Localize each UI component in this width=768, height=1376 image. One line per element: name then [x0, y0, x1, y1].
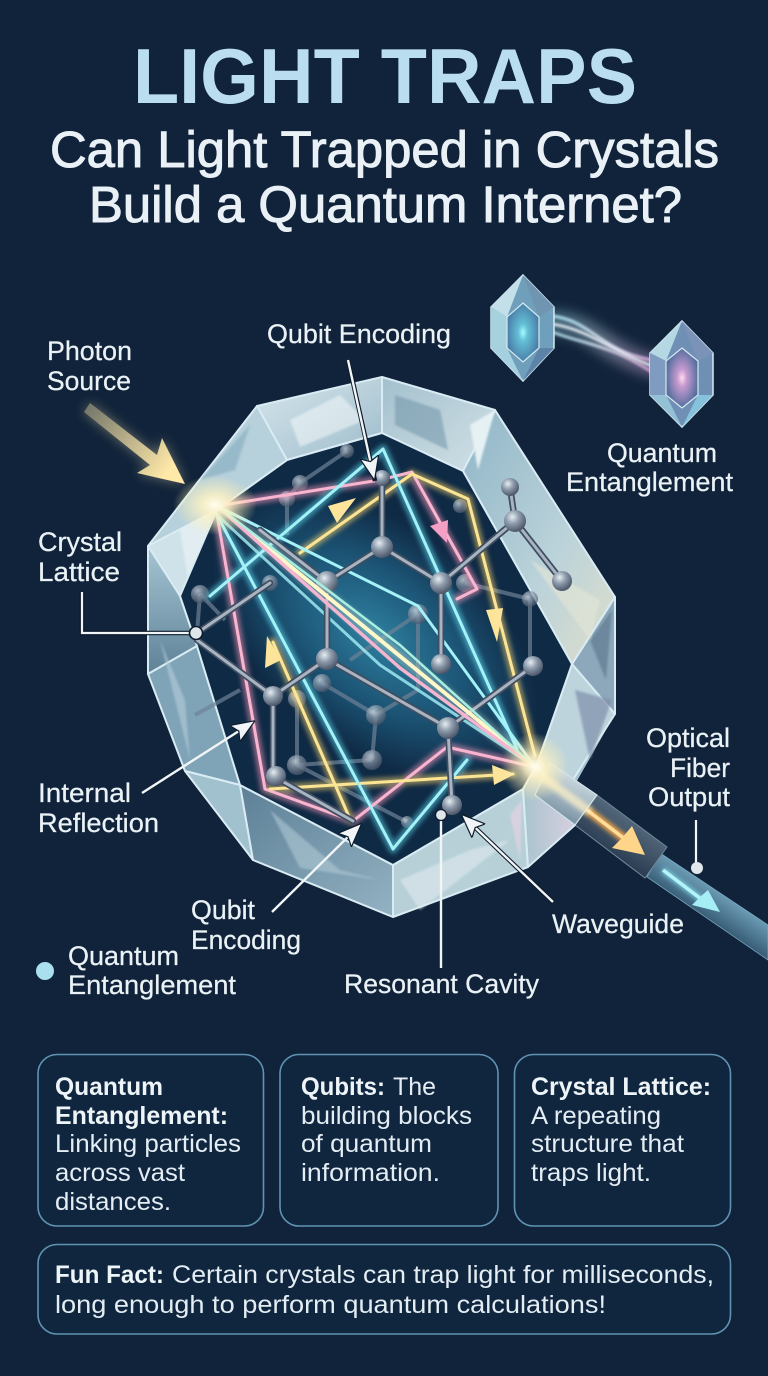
label: crystal lattice: Lattice	[38, 557, 120, 587]
label: photon source: Source	[47, 366, 131, 396]
label: qubit encoding bottom	[191, 895, 301, 955]
arrow: photon source	[84, 403, 185, 484]
subtitle: Build a Quantum Internet?	[89, 176, 682, 233]
legend: quantum entanglement: Entanglement	[68, 970, 236, 1000]
leader: optical fiber output	[691, 820, 703, 874]
back lattice nodes	[191, 444, 538, 828]
label: resonant cavity: Resonant Cavity	[344, 969, 539, 999]
panel: crystal lattice definition: Crystal Lattice:	[531, 1073, 711, 1101]
crystal	[148, 377, 615, 917]
glow layer	[210, 449, 535, 849]
label: quantum entanglement top	[566, 438, 733, 497]
label: internal reflection: Internal	[38, 778, 131, 808]
label: qubit encoding bottom: Encoding	[191, 925, 301, 955]
panel: fun fact: Fun Fact:	[55, 1261, 164, 1289]
label: internal reflection	[38, 778, 159, 838]
label: crystal lattice	[38, 527, 122, 587]
label: optical fiber output	[646, 723, 730, 812]
panel: qubits definition: information.	[301, 1159, 440, 1187]
panel: crystal lattice definition: traps light.	[531, 1159, 651, 1187]
label: optical fiber output: Optical	[646, 723, 730, 753]
title	[50, 32, 719, 233]
label: internal reflection: Reflection	[38, 808, 159, 838]
main diagonal beam	[217, 506, 535, 767]
arrow: waveguide	[462, 815, 553, 902]
yellow direction arrows	[265, 498, 515, 785]
panel: qubits definition: The	[393, 1073, 436, 1101]
crystal facets	[148, 377, 615, 917]
fiber jacket	[575, 795, 667, 878]
panel: qubits definition: building blocks	[301, 1102, 472, 1130]
panel: crystal lattice definition	[514, 1054, 730, 1226]
crystal left	[491, 275, 554, 381]
label: quantum entanglement top: Entanglement	[566, 467, 733, 497]
panel: qubits definition: Qubits:	[301, 1073, 385, 1101]
facet highlights	[160, 395, 612, 910]
subtitle: Can Light Trapped in Crystals	[50, 121, 719, 178]
label: photon source	[47, 336, 132, 396]
panel: qubits definition	[280, 1054, 498, 1226]
legend: quantum entanglement: Quantum	[68, 941, 179, 971]
cavity interior	[180, 433, 572, 865]
icon: entangled crystal pair	[491, 275, 713, 427]
lattice nodes	[263, 470, 572, 815]
exit flare	[501, 733, 569, 801]
label: waveguide: Waveguide	[552, 909, 684, 939]
cyan rays	[210, 449, 535, 849]
arrow: qubit encoding top	[348, 360, 375, 481]
cyan arrow	[663, 870, 720, 912]
leader: resonant cavity	[436, 810, 446, 968]
label: optical fiber output: Output	[648, 782, 730, 812]
label: qubit encoding bottom: Qubit	[191, 895, 255, 925]
title: LIGHT TRAPS	[133, 32, 637, 120]
thin fiber core	[647, 853, 768, 960]
leader: crystal lattice	[82, 592, 202, 640]
label: crystal lattice: Crystal	[38, 527, 122, 557]
light rays	[210, 449, 535, 849]
back lattice	[195, 451, 530, 822]
panel: fun fact: Certain crystals can trap light for milliseconds,	[172, 1261, 714, 1289]
panel: quantum entanglement definition	[38, 1054, 264, 1226]
fiber coupler	[535, 763, 597, 825]
arrow: qubit encoding bottom	[272, 825, 360, 912]
panel: crystal lattice definition: structure that	[531, 1130, 684, 1158]
panel: quantum entanglement definition: across vast	[55, 1159, 185, 1187]
orange arrow	[587, 810, 645, 855]
label: quantum entanglement top: Quantum	[607, 438, 717, 468]
label: optical fiber output: Fiber	[670, 753, 730, 783]
entanglement beam	[552, 316, 652, 372]
lattice bonds	[197, 478, 562, 821]
optical fiber	[575, 795, 768, 960]
panel: quantum entanglement definition: distances.	[55, 1188, 171, 1216]
panel: quantum entanglement definition: Linking particles	[55, 1130, 241, 1158]
panel: quantum entanglement definition: Quantum	[55, 1073, 163, 1101]
front lattice	[197, 470, 572, 821]
panel: fun fact: long enough to perform quantum calculations!	[55, 1291, 606, 1319]
panel: quantum entanglement definition: Entanglement:	[55, 1102, 228, 1130]
legend: quantum entanglement	[36, 941, 236, 1000]
subtitle	[50, 121, 719, 233]
panel: fun fact	[38, 1244, 730, 1334]
label: photon source: Photon	[47, 336, 132, 366]
pink direction arrow	[430, 520, 448, 543]
panel: qubits definition: of quantum	[301, 1130, 432, 1158]
yellow rays	[270, 474, 535, 819]
pink rays	[217, 472, 535, 821]
panel: crystal lattice definition: A repeating	[531, 1102, 661, 1130]
label: qubit encoding top: Qubit Encoding	[267, 319, 451, 349]
arrow: internal reflection	[142, 722, 253, 793]
entry flare	[173, 475, 257, 535]
crystal right	[650, 321, 713, 427]
